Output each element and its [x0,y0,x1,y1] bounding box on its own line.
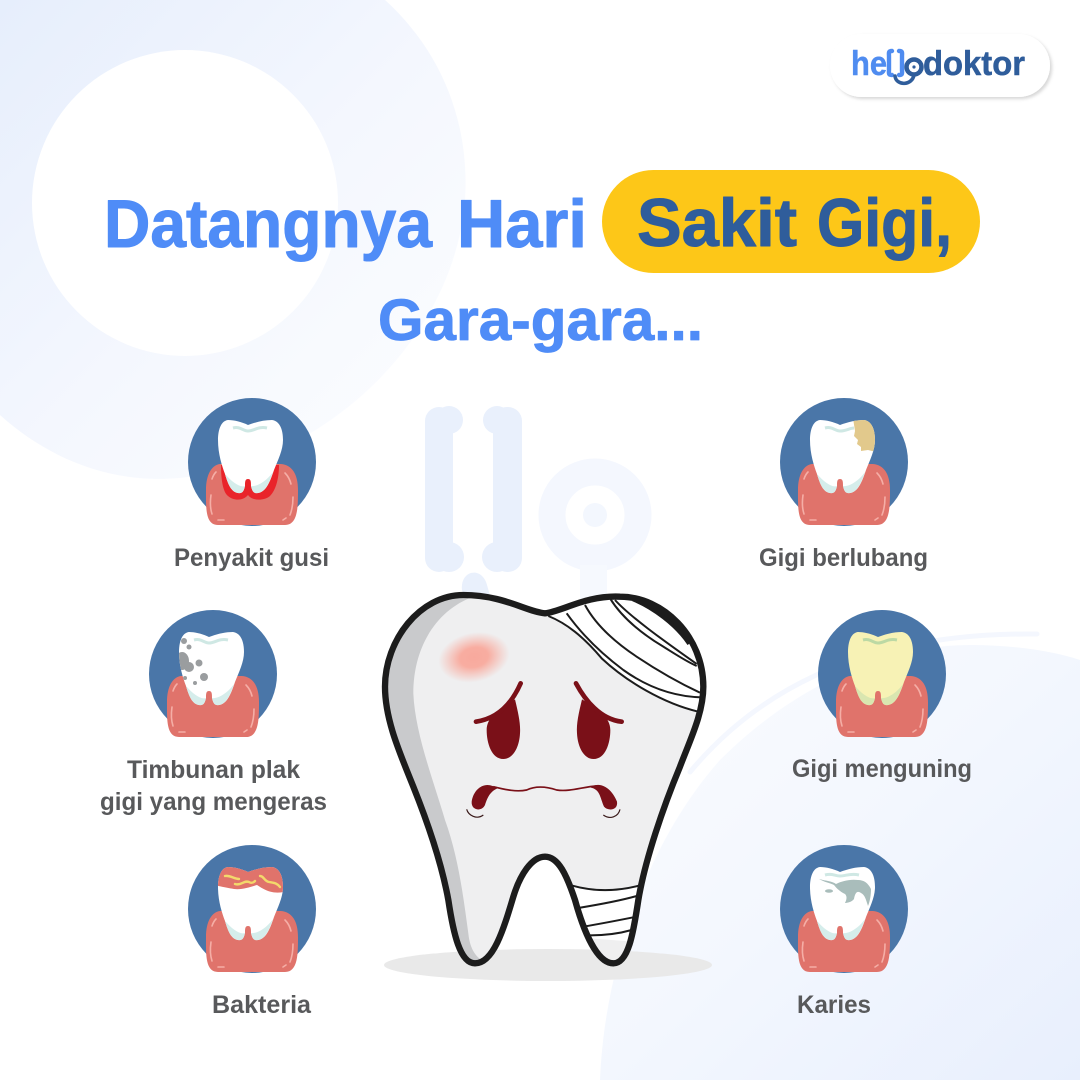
title pill: Sakit Gigi [602,170,980,273]
logo wordmark: hello [851,45,922,83]
background: bottom-right light blue shape [600,645,1080,1080]
title pill: Sakit Gigi: Gigi, [817,185,952,261]
mouth [467,785,620,817]
icon: bacteria tooth [188,845,316,973]
logo wordmark: hello: he [851,45,887,83]
label: Penyakit gusi: Penyakit gusi [174,544,329,572]
bandage: root [570,885,642,942]
background: top-left light blue shape [0,0,466,479]
label: Karies: Karies [797,991,871,1019]
blush bruise [434,626,514,689]
label: Timbunan plak gigi yang mengeras: Timbunan plak [127,756,300,784]
icon: caries tooth [780,845,908,973]
background: white circle [32,50,338,356]
eyes and brows [476,683,622,759]
title: Datangnya Hari: Datangnya [104,186,433,262]
label: Gigi berlubang: Gigi berlubang [759,544,928,572]
bandage: top [548,600,700,712]
tooth outline [385,595,703,963]
watermark: stethoscope logo [425,406,638,610]
icon: tartar tooth [149,610,277,738]
label: Timbunan plak gigi yang mengeras: gigi yang mengeras [100,788,327,816]
label: Timbunan plak gigi yang mengeras [100,756,327,816]
icon: gum disease tooth [188,398,316,526]
title pill: Sakit Gigi: Sakit [637,185,797,261]
background: thin arc [690,634,1037,772]
subtitle: Gara-gara: Gara-gara... [378,288,703,353]
label: Gigi menguning: Gigi menguning [792,755,972,783]
logo wordmark: doktor: doktor [923,45,1025,83]
title: Datangnya Hari: Hari [457,186,587,262]
icon: cavity tooth [780,398,908,526]
label: Bakteria: Bakteria [212,991,312,1019]
main tooth character [370,587,710,970]
tooth side shading [388,598,480,960]
logo badge [830,34,1050,97]
ground shadow [384,949,712,981]
icon: yellowed tooth [818,610,946,738]
